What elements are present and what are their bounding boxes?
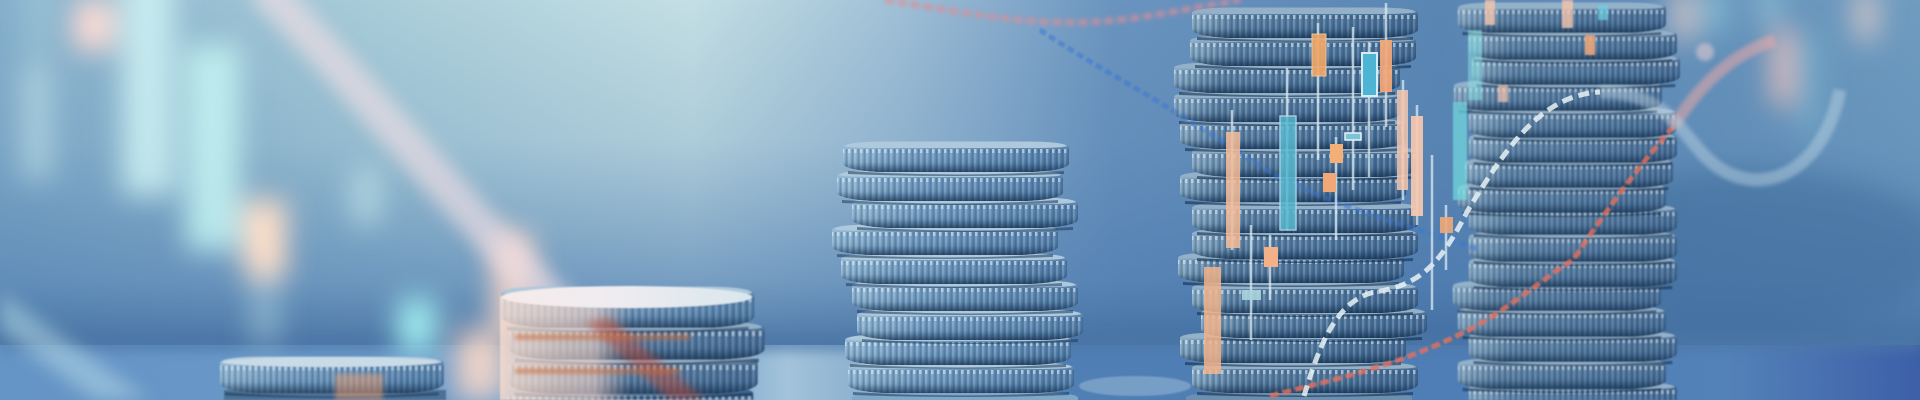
candle: pale orange mid <box>1498 85 1508 102</box>
coin stack 5: tallest stack, slightly out of focus <box>1453 2 1680 400</box>
dashed trend line: top red <box>885 0 1240 22</box>
coin stack 2: four pale coins <box>500 286 770 400</box>
candle: pale orange left <box>1226 132 1240 248</box>
dot marker <box>1696 43 1714 61</box>
candle: cyan left <box>1453 102 1467 200</box>
candle: pale orange top mid <box>1562 0 1573 28</box>
candle: small orange right <box>1440 217 1453 233</box>
blurred red line: upper right <box>1673 40 1775 127</box>
dashed trend line: white curve <box>1304 92 1600 396</box>
candle: cyan tall <box>1280 116 1296 230</box>
candle: orange lower <box>1264 247 1278 267</box>
candle: small orange <box>1330 144 1343 163</box>
coin stack 1: single coin <box>220 357 446 400</box>
candle: pale orange bottom <box>1204 267 1221 374</box>
candle: cyan <box>1362 53 1377 96</box>
candlestick chart over coin stack 5, slightly blurred <box>1453 0 1608 200</box>
wicks <box>1232 3 1446 340</box>
candle: cyan top <box>1598 5 1608 20</box>
candle: pale orange top left <box>1485 0 1495 25</box>
candlestick chart over coin stack 4 <box>1204 3 1453 374</box>
blurred trend band: pink diagonal line <box>262 0 590 340</box>
dashed trend line: blue <box>1040 30 1480 250</box>
candle: pale orange tall <box>1397 90 1408 190</box>
table surface <box>0 334 1920 400</box>
faint flat coin on table <box>1079 376 1191 396</box>
blurred white curve: right loop <box>1600 90 1840 180</box>
candle: orange right <box>1380 40 1392 92</box>
candle: orange small <box>1585 35 1595 55</box>
blurred candlesticks: left background chart <box>22 0 532 400</box>
candle: small white <box>1345 133 1361 140</box>
candle: small cyan low <box>1242 290 1261 300</box>
coin stack 3: ten coins <box>832 142 1083 400</box>
candle: small orange low <box>1323 173 1336 192</box>
candle: pale orange far right <box>1411 116 1423 216</box>
candle: orange <box>1312 34 1326 76</box>
dashed trend line: red rising <box>1270 127 1673 396</box>
blurred candlesticks: right background chart <box>1673 0 1877 135</box>
blurred trend band: lower left <box>0 292 150 400</box>
coin stack 4: tall stack <box>1174 8 1427 400</box>
candle: cyan upper <box>1468 30 1482 100</box>
